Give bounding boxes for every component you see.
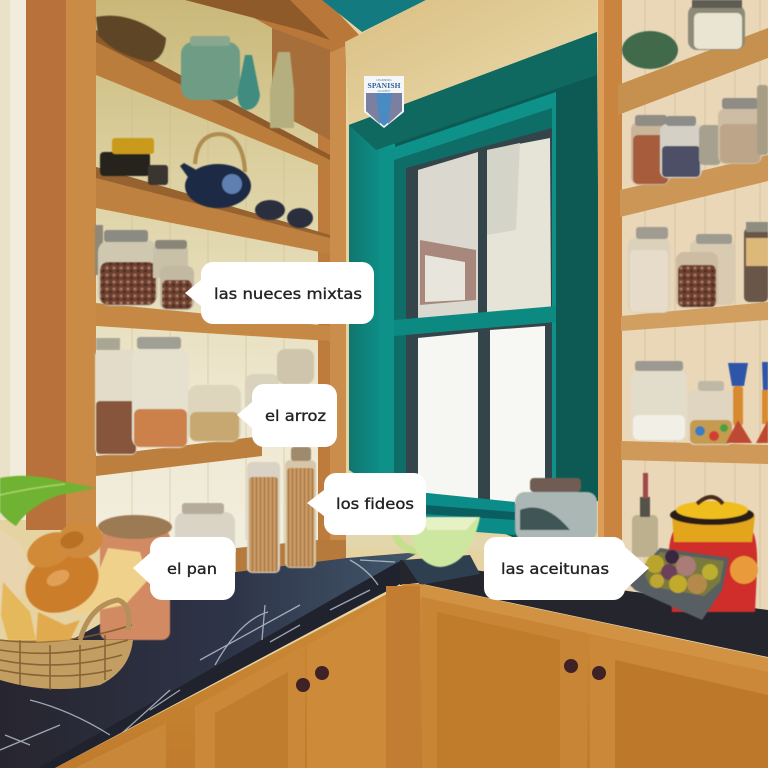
- green bowl: [622, 31, 678, 69]
- teapot: [180, 134, 251, 208]
- flour jar: [631, 361, 687, 441]
- callout: las aceitunas: [484, 537, 649, 600]
- right shelf 3: [621, 302, 768, 331]
- dark grain jar: [676, 252, 718, 308]
- logo: ACADEMY: [378, 89, 391, 93]
- jars: left top shelf: [96, 16, 294, 128]
- red grain jar: [631, 115, 670, 185]
- toy truck: [100, 138, 168, 185]
- small jar: [153, 240, 188, 278]
- wall above window: [345, 0, 597, 125]
- oil bottle: [632, 473, 658, 557]
- dark nut jar: [160, 266, 194, 310]
- basket handle: [80, 600, 129, 640]
- counter surface: [0, 552, 420, 768]
- bread roll bottom: [1, 582, 36, 640]
- white rice jar: [628, 227, 670, 313]
- pasta jar two: [285, 447, 316, 568]
- wood column: [598, 0, 622, 540]
- callout: los fideos: [307, 473, 426, 535]
- bread roll right: [72, 548, 148, 615]
- pasta jar one: [247, 462, 280, 573]
- green glass jar: [181, 36, 240, 100]
- logo: LEARNING: [376, 78, 392, 82]
- ceramic jar: [668, 497, 758, 612]
- rice jar: [188, 385, 241, 442]
- back panel: [618, 0, 768, 650]
- small shelf wood band behind pasta: [236, 540, 346, 572]
- basket body: [0, 625, 133, 690]
- dark bowl: [96, 16, 166, 62]
- clip-top jar: [175, 503, 235, 572]
- terracotta canister: [98, 515, 172, 640]
- clear tall jar: [690, 234, 735, 305]
- cup one: [255, 200, 285, 220]
- panel: window: [346, 32, 600, 552]
- panel: right counter: [400, 555, 768, 657]
- shelf 1: [96, 30, 330, 170]
- right cabinet top rail: [420, 584, 768, 672]
- red goblet: [756, 362, 768, 443]
- callout: el pan: [133, 537, 235, 600]
- panel: right shelving unit: [598, 0, 768, 650]
- braided roll: [15, 518, 109, 624]
- callout: el arroz: el arroz: [265, 407, 326, 425]
- left wood column: [26, 0, 96, 530]
- marble veins: [0, 560, 395, 750]
- clear bottle: [270, 52, 294, 128]
- door: right left: [422, 597, 587, 768]
- top teal ceiling trim: [322, 0, 426, 32]
- top casing: [349, 32, 597, 150]
- door: left right: [307, 600, 386, 768]
- cut-off jar: [757, 85, 768, 155]
- olive bowl: [628, 548, 729, 620]
- lentil jar: [95, 338, 137, 455]
- teal vase: [238, 55, 260, 110]
- door: left left: [195, 645, 305, 768]
- corner post: [386, 586, 420, 768]
- cabinet base: [55, 584, 768, 768]
- orange lentil jar: [132, 337, 189, 448]
- nut jars on third shelf: [95, 225, 194, 310]
- shelf 4: [96, 436, 262, 476]
- blue jar: [660, 116, 702, 178]
- mixed nuts jar: [98, 230, 158, 306]
- small jar: [699, 125, 721, 165]
- panel: left counter: [0, 552, 420, 768]
- tall left jar sliver: [95, 225, 103, 275]
- callout: las aceitunas: las aceitunas: [501, 560, 609, 578]
- cup two: [287, 208, 313, 228]
- back panel of left shelves: [96, 0, 320, 560]
- crown top: [148, 0, 362, 52]
- toy truck and teapot: [100, 134, 313, 228]
- cut-off dark jar: [744, 222, 768, 302]
- bread basket: [0, 518, 148, 690]
- shelf 3: [96, 303, 330, 341]
- right shelf 1: [618, 28, 768, 115]
- right shelf 4: [621, 441, 768, 464]
- door: far left: [75, 723, 166, 768]
- loaf left: [0, 530, 28, 615]
- shelf 2: [96, 167, 330, 254]
- right wood column of left unit: [318, 40, 346, 560]
- pasta jars: [247, 447, 316, 573]
- plant leaf: [0, 476, 96, 526]
- panel: left shelving unit: [26, 0, 362, 560]
- large glass jar: [515, 478, 597, 540]
- counter edge: [38, 560, 402, 768]
- dark teal casing: [349, 32, 600, 538]
- callout: las nueces mixtas: [185, 262, 374, 324]
- callout: el arroz: [237, 384, 337, 447]
- bright left casing: [349, 108, 395, 500]
- candy jar: [688, 381, 734, 445]
- callout: las nueces mixtas: las nueces mixtas: [214, 285, 362, 303]
- clear jar: [245, 374, 279, 414]
- top jar: [688, 0, 745, 50]
- lower right pane: [490, 326, 545, 505]
- callout: el pan: el pan: [167, 560, 217, 578]
- top clear jar: [277, 349, 314, 384]
- panel: lower cabinets: [55, 584, 768, 768]
- door: right right: [590, 635, 768, 768]
- grain jars on fourth shelf: [95, 337, 314, 455]
- upper left pane: [418, 152, 478, 322]
- blue goblet: [726, 363, 752, 443]
- green mixing bowl: [392, 517, 480, 567]
- callout: los fideos: los fideos: [336, 495, 414, 513]
- window glass frame: [406, 128, 552, 518]
- bean jar: [718, 98, 762, 164]
- window sill: [378, 488, 515, 535]
- lower left pane: [418, 332, 478, 500]
- meeting rail: [394, 306, 556, 336]
- logo: SPANISH: [368, 81, 401, 90]
- knobs: [296, 659, 606, 692]
- upper right pane: [487, 138, 551, 316]
- sash frame: [380, 92, 556, 525]
- wall under sill: [346, 472, 515, 552]
- right shelf jars: [622, 0, 768, 445]
- logo: [364, 76, 404, 128]
- right shelf 2: [620, 155, 768, 217]
